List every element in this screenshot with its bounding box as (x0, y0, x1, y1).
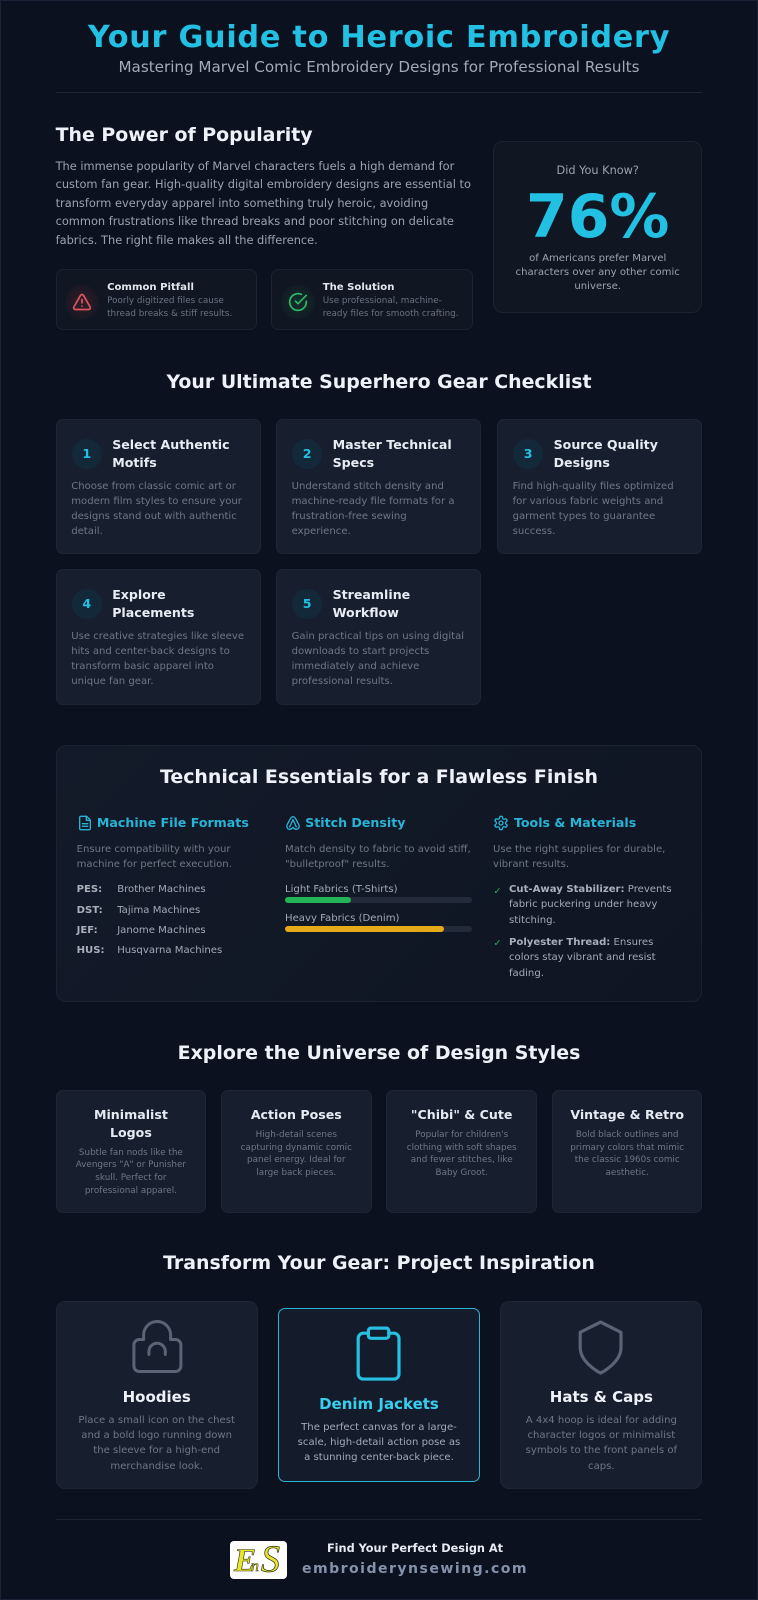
intro paragraph: fabrics. The right file makes all the difference. (56, 233, 318, 247)
column intro: Ensure compatibility with your (77, 844, 231, 855)
text: common pitfall: Common Pitfall (107, 282, 194, 292)
icon: hoodie (132, 1320, 182, 1373)
checklist card 5 (276, 569, 481, 705)
list: file formats: Janome Machines (117, 925, 206, 936)
list item: stabilizer (493, 884, 672, 926)
footer logo: E (233, 1543, 256, 1579)
project description: the sleeve for a high-end (93, 1445, 220, 1456)
footer text: Find Your Perfect Design At (327, 1542, 503, 1555)
card description: detail. (71, 526, 103, 537)
style title: Logos (110, 1125, 152, 1140)
column: stitch density (285, 815, 472, 932)
card title: Designs (554, 455, 610, 470)
list: file formats: JEF: (77, 925, 98, 936)
project description: symbols to the front panels of (526, 1445, 677, 1456)
card description (71, 481, 242, 537)
card description: modern film styles to ensure your (71, 496, 242, 507)
column intro: machine for perfect execution. (77, 859, 232, 870)
style description (241, 1130, 352, 1178)
card description: for various fabric weights and (513, 496, 663, 507)
panel: did you know stat (493, 141, 702, 313)
number 2 (292, 439, 322, 469)
icon: warning triangle (65, 284, 99, 318)
column: machine file formats (76, 815, 249, 956)
card description: designs stand out with authentic (71, 511, 237, 522)
project description (298, 1422, 460, 1463)
list: file formats: Husqvarna Machines (117, 945, 222, 956)
text: solution description: ready files for smooth crafting. (323, 309, 459, 319)
project description: Place a small icon on the chest (78, 1415, 235, 1426)
card description: downloads to start projects (292, 646, 429, 657)
card title (554, 437, 658, 470)
card description (292, 631, 464, 687)
column intro: Match density to fabric to avoid stiff, (285, 844, 471, 855)
bar: heavy fabrics: Heavy Fabrics (Denim) (285, 913, 399, 924)
list: file formats (76, 884, 222, 956)
panel: the solution (271, 269, 473, 330)
list item: stabilizer: ✓ (493, 886, 501, 897)
style title (94, 1107, 168, 1140)
intro paragraph (56, 159, 471, 247)
style description: large back pieces. (256, 1168, 336, 1178)
project title: Denim Jackets (319, 1395, 439, 1413)
style description: skull. Perfect for (95, 1173, 166, 1183)
style title: "Chibi" & Cute (411, 1107, 512, 1122)
number 5: 5 (303, 596, 312, 611)
project card: hats and caps (500, 1301, 702, 1489)
card description: unique fan gear. (71, 676, 154, 687)
project description: The perfect canvas for a large- (301, 1422, 457, 1433)
panel: common pitfall (56, 269, 257, 330)
footer logo: n (251, 1558, 259, 1575)
style title: Action Poses (251, 1107, 342, 1122)
card description: Use creative strategies like sleeve (71, 631, 244, 642)
style description: Bold black outlines and (576, 1130, 678, 1140)
project description: a stunning center-back piece. (304, 1452, 454, 1463)
style card: vintage and retro (552, 1090, 702, 1213)
project title: Hoodies (123, 1388, 191, 1406)
footer logo (230, 1541, 287, 1579)
style description: capturing dynamic comic (241, 1143, 352, 1153)
card description: Gain practical tips on using digital (292, 631, 464, 642)
stat caption (516, 253, 680, 292)
card description: garment types to guarantee (513, 511, 655, 522)
style title: Vintage & Retro (570, 1107, 684, 1122)
style description: and fewer stitches, like (411, 1155, 513, 1165)
card title (333, 587, 410, 620)
card title: Select Authentic (112, 437, 230, 452)
footer logo: S (261, 1538, 280, 1580)
column heading: Machine File Formats (97, 815, 249, 830)
project description: A 4x4 hoop is ideal for adding (526, 1415, 677, 1426)
project title: Hats & Caps (550, 1388, 653, 1406)
style description: the classic 1960s comic (575, 1155, 680, 1165)
card title (112, 437, 230, 470)
style description: Avengers "A" or Punisher (76, 1160, 186, 1170)
card description: experience. (292, 526, 351, 537)
style description: Subtle fan nods like the (79, 1148, 183, 1158)
text: solution description: Use professional, machine- (323, 296, 442, 306)
card description: success. (513, 526, 555, 537)
stat caption: universe. (574, 281, 621, 292)
number 1: 1 (82, 446, 91, 461)
style card: minimalist logos (56, 1090, 206, 1213)
list item: thread (493, 937, 656, 979)
footer text (302, 1542, 528, 1577)
column heading: Tools & Materials (514, 815, 636, 830)
column: tools and materials (493, 815, 672, 979)
style card: chibi and cute (386, 1090, 537, 1213)
list: file formats: Tajima Machines (117, 905, 200, 916)
project card: hoodies (56, 1301, 258, 1489)
card description: Understand stitch density and (292, 481, 444, 492)
style title: Minimalist (94, 1107, 168, 1122)
style description: Baby Groot. (436, 1168, 488, 1178)
text: pitfall description: Poorly digitized files cause (107, 296, 224, 306)
list item: stabilizer: fabric puckering under heavy (509, 899, 657, 910)
card title: Source Quality (554, 437, 658, 452)
text: solution description (323, 296, 459, 319)
heading: technical essentials: Technical Essentials for a Flawless Finish (160, 766, 598, 788)
project card: denim jackets (highlighted) (278, 1308, 480, 1482)
subtitle: Mastering Marvel Comic Embroidery Designs for Professional Results (118, 58, 640, 76)
icon: gear (494, 816, 508, 830)
project description: scale, high-detail action pose as (298, 1437, 460, 1448)
stat label: Did You Know? (556, 164, 639, 177)
style card: action poses (221, 1090, 372, 1213)
list item: thread: colors stay vibrant and resist (509, 952, 656, 963)
checklist card 4 (56, 569, 261, 705)
text: the solution: The Solution (323, 282, 394, 292)
list: file formats: DST: (77, 905, 103, 916)
style description: aesthetic. (606, 1168, 649, 1178)
card description: transform basic apparel into (71, 661, 214, 672)
stat value: 76%: 76% (526, 182, 669, 252)
title: Your Guide to Heroic Embroidery (88, 20, 670, 55)
icon: clipboard (356, 1326, 401, 1381)
stat caption: of Americans prefer Marvel (529, 253, 666, 264)
list item: thread: Polyester Thread: Ensures (509, 937, 653, 948)
panel: technical essentials (56, 745, 702, 1002)
stat caption: characters over any other comic (516, 267, 680, 278)
card title: Master Technical (333, 437, 452, 452)
checklist card 3 (497, 419, 702, 554)
bar: heavy fabrics (285, 913, 472, 932)
project description: and a bold logo running down (81, 1430, 232, 1441)
card title (112, 587, 194, 620)
card description: machine-ready file formats for a (292, 496, 455, 507)
project description (526, 1415, 678, 1472)
card title: Placements (112, 605, 194, 620)
intro paragraph: The immense popularity of Marvel characters fuels a high demand for (56, 159, 454, 173)
heading: checklist: Your Ultimate Superhero Gear Checklist (166, 371, 592, 393)
intro paragraph: custom fan gear. High-quality digital embroidery designs are essential to (56, 177, 471, 191)
project description: merchandise look. (110, 1461, 203, 1472)
card title: Specs (333, 455, 374, 470)
footer text: embroiderynsewing.com (302, 1561, 528, 1577)
list: file formats: PES: (77, 884, 102, 895)
project description: character logos or minimalist (527, 1430, 675, 1441)
number 4 (72, 589, 102, 619)
heading: design styles: Explore the Universe of Design Styles (178, 1042, 580, 1064)
card title (333, 437, 452, 470)
heading: the power of popularity: The Power of Popularity (56, 124, 313, 146)
number 5 (292, 589, 322, 619)
card description: Choose from classic comic art or (71, 481, 236, 492)
icon: check circle (281, 284, 315, 318)
list item: stabilizer: Cut-Away Stabilizer: Prevents (509, 884, 672, 895)
checklist card 1 (56, 419, 261, 554)
card title: Workflow (333, 605, 399, 620)
column intro: vibrant results. (493, 859, 569, 870)
style description (570, 1130, 684, 1178)
card description (71, 631, 244, 687)
style description: primary colors that mimic (570, 1143, 684, 1153)
number 1 (72, 439, 102, 469)
checklist card 2 (276, 419, 481, 554)
list item: stabilizer: stitching. (509, 915, 556, 926)
intro paragraph: common frustrations like thread breaks and poor stitching on delicate (56, 214, 454, 228)
card description: professional results. (292, 676, 393, 687)
column intro (493, 844, 665, 870)
number 2: 2 (303, 446, 312, 461)
column intro (77, 844, 232, 870)
card description: immediately and achieve (292, 661, 419, 672)
number 3: 3 (524, 446, 533, 461)
card description: hits and center-back designs to (71, 646, 230, 657)
card description: Find high-quality files optimized (513, 481, 674, 492)
icon: stitch (286, 816, 300, 830)
project description: caps. (588, 1461, 615, 1472)
column intro: "bulletproof" results. (285, 859, 389, 870)
column intro (285, 844, 471, 870)
style description: panel energy. Ideal for (247, 1155, 346, 1165)
bar: light fabrics (285, 884, 472, 903)
list: file formats: HUS: (77, 945, 105, 956)
icon: file (79, 816, 91, 830)
list item: thread: ✓ (493, 938, 501, 949)
project description (78, 1415, 235, 1472)
card description: frustration-free sewing (292, 511, 407, 522)
number 4: 4 (82, 596, 91, 611)
list item: thread: fading. (509, 968, 544, 979)
intro paragraph: transform everyday apparel into something truly heroic, avoiding (56, 196, 428, 210)
style description: High-detail scenes (256, 1130, 337, 1140)
style description: Popular for children's (415, 1130, 508, 1140)
text: pitfall description: thread breaks & stiff results. (107, 309, 232, 319)
column intro: Use the right supplies for durable, (493, 844, 665, 855)
list: file formats: Brother Machines (117, 884, 206, 895)
card title: Explore (112, 587, 166, 602)
text: pitfall description (107, 296, 232, 319)
icon: shield (578, 1320, 623, 1375)
bar: light fabrics: Light Fabrics (T-Shirts) (285, 884, 398, 895)
card description (292, 481, 455, 537)
heading: project inspiration: Transform Your Gear: Project Inspiration (163, 1252, 595, 1274)
style description: professional apparel. (85, 1186, 177, 1196)
card description (512, 481, 674, 537)
card title: Streamline (333, 587, 410, 602)
number 3 (513, 439, 543, 469)
column heading: Stitch Density (305, 815, 405, 830)
style description (407, 1130, 517, 1178)
style description: clothing with soft shapes (407, 1143, 517, 1153)
style description (76, 1148, 186, 1196)
card title: Motifs (112, 455, 157, 470)
